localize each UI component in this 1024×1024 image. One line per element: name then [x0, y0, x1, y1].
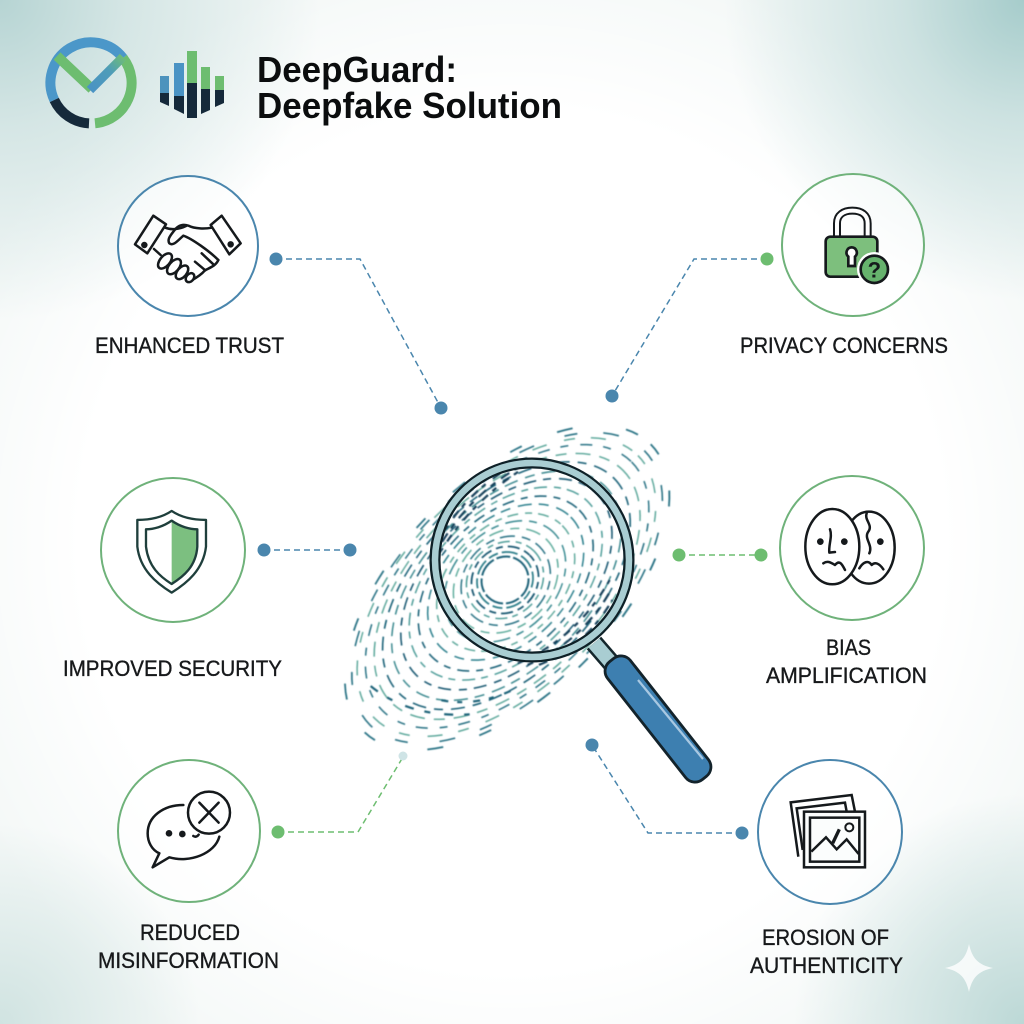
icon: ring check logo	[50, 42, 132, 123]
ring	[780, 476, 924, 620]
connector: erosion of authenticity	[586, 738, 748, 840]
handle neck	[594, 643, 613, 665]
panel: enhanced trust	[95, 176, 284, 358]
label: MISINFORMATION	[98, 948, 279, 973]
label: IMPROVED SECURITY	[63, 656, 282, 681]
panel: privacy concerns	[740, 174, 948, 358]
title: Deepfake Solution	[257, 85, 562, 126]
connector: improved security	[258, 544, 356, 556]
panel: erosion of authenticity	[750, 760, 903, 978]
handle	[600, 651, 716, 787]
ring	[101, 478, 245, 622]
panel: improved security	[63, 478, 282, 681]
connector: enhanced trust	[270, 252, 448, 414]
ring	[118, 176, 258, 316]
icon: handshake	[135, 216, 241, 284]
label: AUTHENTICITY	[750, 953, 903, 978]
header	[50, 42, 562, 126]
label: AMPLIFICATION	[766, 663, 927, 688]
sparkle watermark	[945, 944, 993, 992]
ring	[118, 760, 260, 902]
label: BIAS	[826, 635, 871, 660]
label: REDUCED	[140, 920, 240, 945]
panel: bias amplification	[766, 476, 927, 688]
connector: bias amplification	[672, 548, 768, 562]
icon: shield	[137, 511, 206, 593]
title: DeepGuard:	[257, 49, 457, 90]
icon: stacked photos	[791, 795, 865, 867]
magnifying glass	[435, 463, 716, 787]
fingerprint graphic	[288, 369, 726, 807]
icon: bar chart logo	[160, 51, 224, 118]
dark band clusters	[326, 451, 643, 768]
icon: two faces	[805, 509, 895, 584]
ring	[782, 174, 924, 316]
label: ENHANCED TRUST	[95, 333, 284, 358]
ring	[758, 760, 902, 904]
lens ring	[435, 463, 629, 657]
icon: padlock with question mark	[826, 211, 892, 287]
label: PRIVACY CONCERNS	[740, 333, 948, 358]
icon: chat bubble with x	[148, 792, 230, 867]
connector: reduced misinformation	[272, 752, 408, 838]
panel: reduced misinformation	[98, 760, 279, 973]
icon: padlock with question mark: ?	[868, 257, 881, 282]
label: EROSION OF	[762, 925, 889, 950]
connector: privacy concerns	[606, 252, 774, 402]
